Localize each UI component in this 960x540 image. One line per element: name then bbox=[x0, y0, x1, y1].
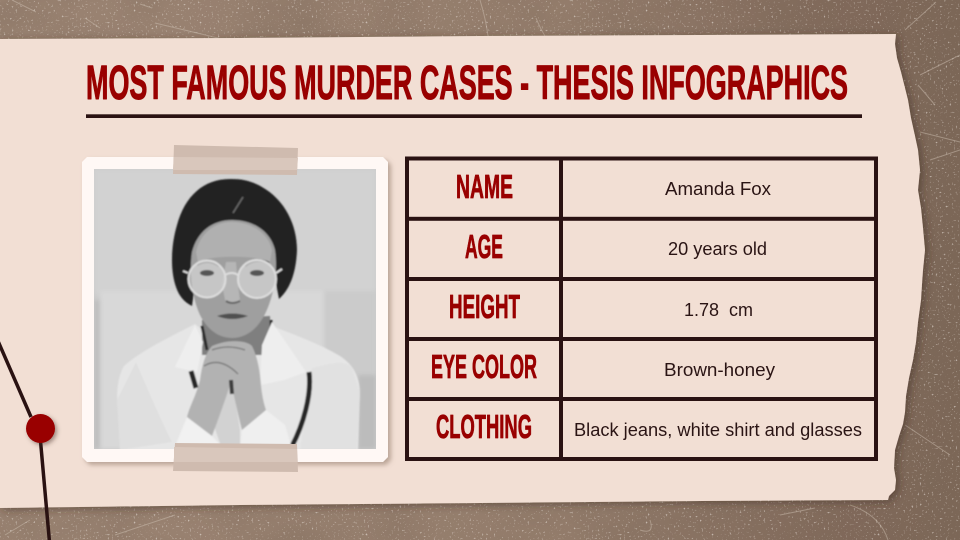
tape: top bbox=[173, 145, 298, 175]
lapel under arms bbox=[215, 388, 240, 444]
row: eye color: Brown-honey bbox=[664, 360, 775, 380]
row: age: AGE bbox=[465, 228, 503, 265]
info table bbox=[405, 156, 878, 461]
row: clothing bbox=[436, 408, 862, 445]
row: age bbox=[465, 228, 767, 265]
hands bbox=[187, 341, 266, 436]
row: eye color: EYE COLOR bbox=[431, 348, 537, 385]
photo: woman with glasses in white coat bbox=[94, 169, 376, 450]
row: clothing: Black jeans, white shirt and glasses bbox=[574, 420, 862, 440]
row: name: NAME bbox=[456, 168, 513, 205]
cuffs bbox=[177, 417, 218, 443]
row: age: 20 years old bbox=[668, 239, 767, 259]
neck bbox=[202, 316, 272, 355]
coat bbox=[117, 324, 360, 450]
photo frame bbox=[82, 145, 388, 472]
row: clothing: CLOTHING bbox=[436, 408, 532, 445]
mouth bbox=[217, 314, 248, 319]
tape: bottom bbox=[173, 443, 298, 472]
row: height: HEIGHT bbox=[449, 288, 520, 325]
row: height: 1.78 cm bbox=[684, 300, 753, 320]
hair bbox=[172, 179, 297, 306]
row: name: Amanda Fox bbox=[665, 179, 771, 199]
row: height bbox=[449, 288, 753, 325]
red pin with string bbox=[0, 341, 55, 540]
face bbox=[191, 220, 276, 338]
stethoscope bbox=[191, 371, 196, 388]
row: eye color bbox=[431, 348, 775, 385]
table grid bbox=[405, 156, 878, 461]
row: name bbox=[456, 168, 771, 205]
collars bbox=[200, 340, 204, 347]
glasses bbox=[188, 260, 226, 298]
